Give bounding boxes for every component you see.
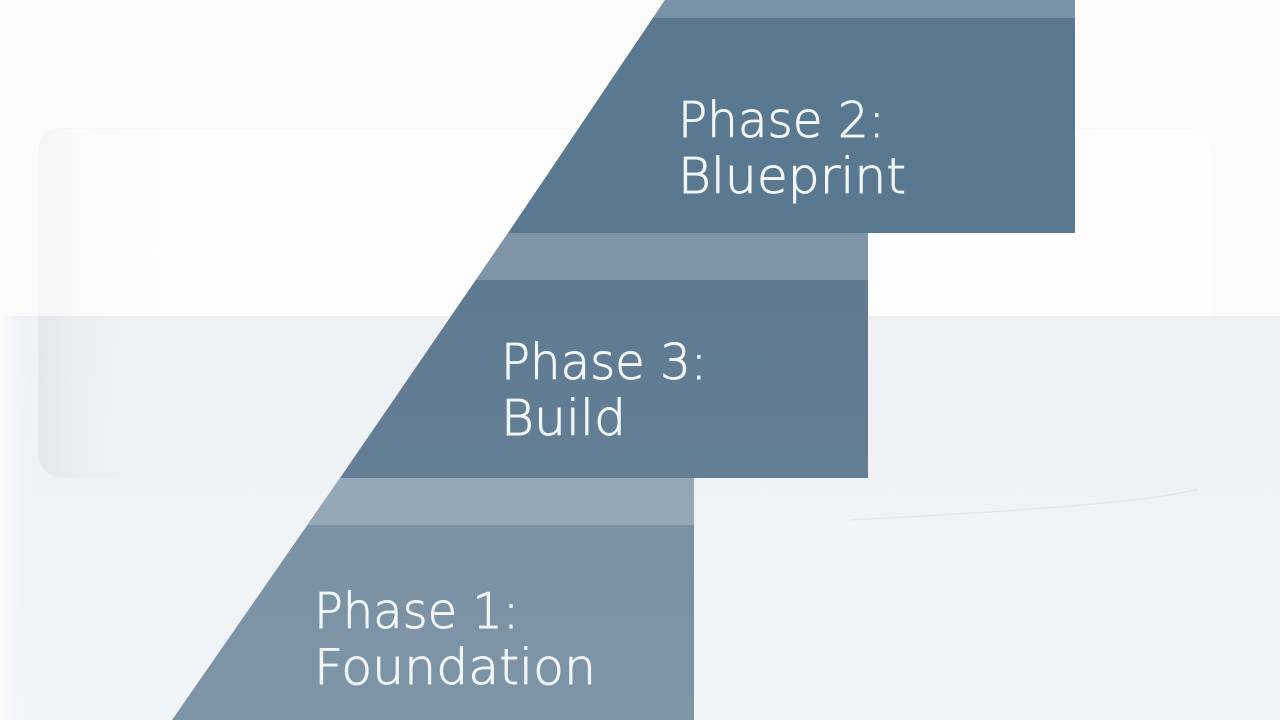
label: Phase 3 Build: Build bbox=[501, 390, 626, 447]
phase 2 highlight band bbox=[653, 0, 1075, 18]
label: Phase 3 Build: Phase 3: bbox=[501, 334, 707, 391]
label: Phase 1 Foundation: Phase 1: bbox=[314, 583, 519, 640]
phase 3 block: Build bbox=[340, 233, 868, 478]
phase 1 highlight band bbox=[308, 478, 694, 525]
label: Phase 3 Build bbox=[501, 334, 707, 447]
label: Phase 1 Foundation bbox=[314, 583, 596, 696]
phase 1 block: Foundation bbox=[172, 478, 694, 720]
label: Phase 2 Blueprint: Phase 2: bbox=[678, 92, 885, 149]
label: Phase 2 Blueprint: Blueprint bbox=[678, 148, 906, 205]
phase 2 block: Blueprint bbox=[508, 0, 1075, 233]
label: Phase 2 Blueprint bbox=[678, 92, 906, 205]
glass card panel bbox=[38, 128, 1213, 520]
label: Phase 1 Foundation: Foundation bbox=[314, 639, 596, 696]
phase 3 highlight band bbox=[476, 233, 868, 280]
